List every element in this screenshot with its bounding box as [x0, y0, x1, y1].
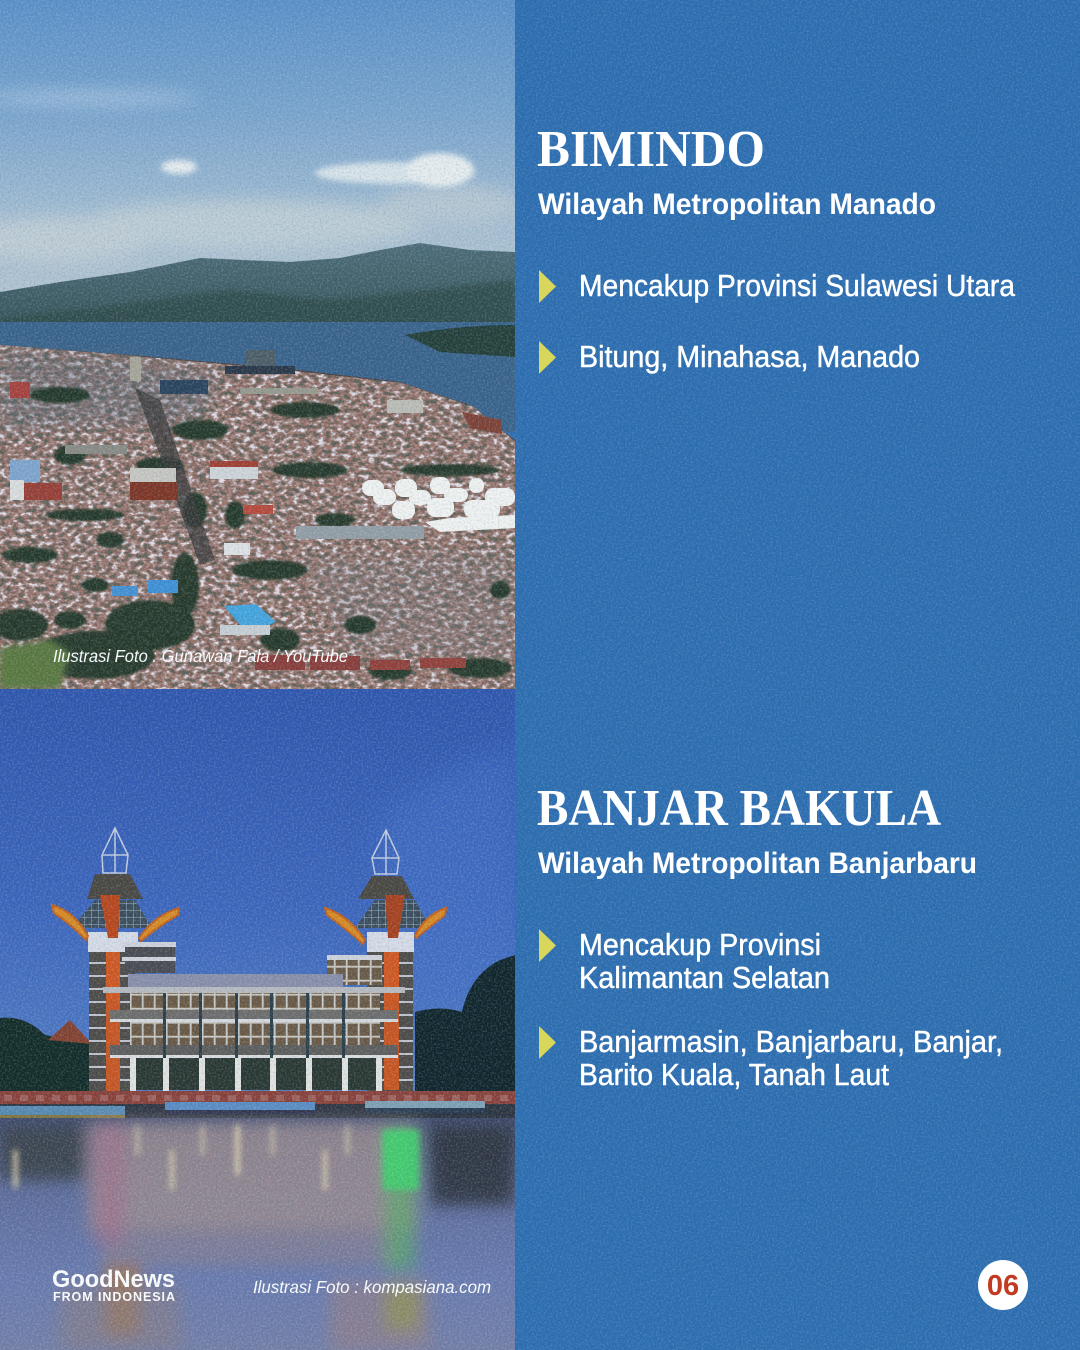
page number badge [978, 1260, 1028, 1310]
logo: GoodNews from Indonesia [53, 1270, 175, 1301]
bullet: cities: Banjarmasin, Banjarbaru, Banjar, [579, 1024, 1003, 1059]
bullet: cities [539, 1024, 1003, 1092]
bullet: province [539, 927, 830, 995]
building: towers and main hall [52, 828, 446, 1100]
bullet: cities: Barito Kuala, Tanah Laut [579, 1057, 889, 1092]
caption: bottom photo credit: Ilustrasi Foto : kompasiana.com [253, 1277, 491, 1297]
heading: Bimindo: BIMINDO [537, 121, 765, 178]
trees left and right [0, 955, 515, 1100]
caption: top photo credit: Ilustrasi Foto : Gunawan Fala / YouTube [53, 646, 348, 666]
bullet: province: Mencakup Provinsi Sulawesi Utara [579, 268, 1016, 303]
subheading: Wilayah Metropolitan Manado: Wilayah Metropolitan Manado [538, 188, 936, 221]
page number badge: 06 [987, 1270, 1019, 1302]
logo: GoodNews from Indonesia: GoodNews [52, 1266, 175, 1293]
section: Banjar Bakula [537, 780, 1003, 1092]
heading: Banjar Bakula: BANJAR BAKULA [537, 780, 941, 837]
grain over photos [0, 0, 515, 1350]
photo: Manado aerial city view [0, 0, 520, 689]
logo: GoodNews from Indonesia: FROM INDONESIA [53, 1290, 175, 1304]
bullet: cities: Bitung, Minahasa, Manado [579, 339, 920, 374]
photo: Menara Pandang tower building [0, 689, 515, 1350]
bullet: province: Kalimantan Selatan [579, 960, 830, 995]
bullet: province: Mencakup Provinsi [579, 927, 821, 962]
subheading: Wilayah Metropolitan Banjarbaru: Wilayah Metropolitan Banjarbaru [538, 847, 977, 880]
fence and boats [0, 1091, 515, 1121]
panel: blue background [515, 0, 1080, 1350]
water with blurred reflections [0, 1118, 515, 1350]
section: Bimindo [537, 121, 1016, 374]
